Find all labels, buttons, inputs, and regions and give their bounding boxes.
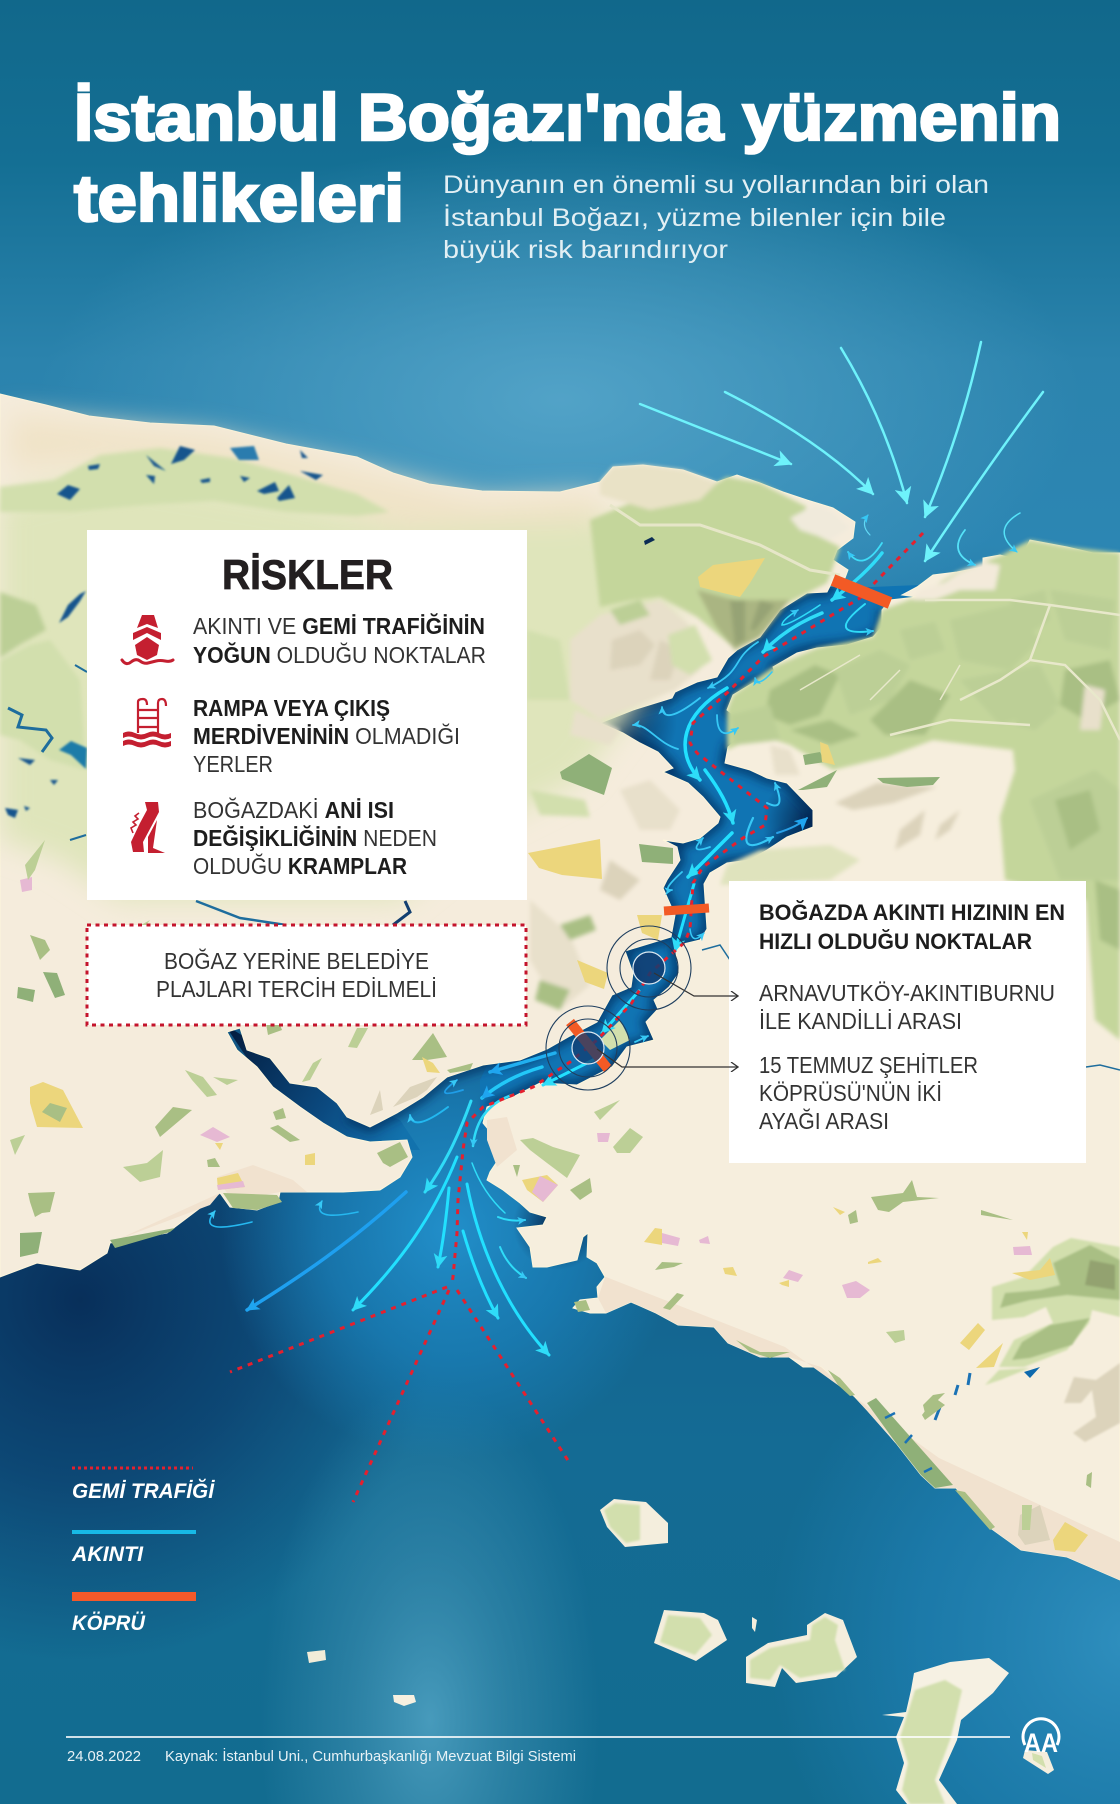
title	[74, 80, 1061, 235]
legend: bridge	[72, 1592, 196, 1635]
icon: AA logo	[1023, 1719, 1059, 1758]
callout: prefer municipal beaches: PLAJLARI TERCİH EDİLMELİ	[156, 976, 437, 1002]
subtitle	[443, 171, 989, 264]
location text: 15 Temmuz bridge: 15 TEMMUZ ŞEHİTLER	[759, 1052, 978, 1078]
field patches south-west	[30, 1082, 83, 1128]
location text: 15 Temmuz bridge: AYAĞI ARASI	[759, 1108, 889, 1134]
lower Asian terrain	[720, 845, 860, 885]
panel: risks: RİSKLER	[222, 551, 393, 598]
risk text: currents and ship traffic: AKINTI VE GEMİ TRAFİĞİNİN	[193, 612, 485, 639]
risk text: cramps	[193, 797, 437, 879]
panel heading: BOĞAZDA AKINTI HIZININ EN	[759, 900, 1065, 925]
fast current hotspot: Arnavutköy-Kandilli	[607, 926, 691, 1010]
title: tehlikeleri	[74, 161, 404, 235]
land: Asian side	[483, 540, 1120, 1580]
southern Asian hill	[985, 1238, 1120, 1442]
location text: 15 Temmuz bridge	[759, 1052, 978, 1134]
icon: AA logo: AA	[1024, 1728, 1058, 1758]
risk text: cramps: BOĞAZDAKİ ANİ ISI	[193, 797, 394, 823]
risk text: missing ramps or ladders: RAMPA VEYA ÇIKIŞ	[193, 695, 390, 721]
risk text: currents and ship traffic: YOĞUN OLDUĞU NOKTALAR	[193, 641, 486, 668]
location text: 15 Temmuz bridge: KÖPRÜSÜ'NÜN İKİ	[759, 1080, 942, 1106]
callout: prefer municipal beaches	[87, 925, 526, 1025]
location text: Arnavutköy	[759, 980, 1055, 1034]
risk text: cramps: DEĞİŞİKLİĞİNİN NEDEN	[193, 824, 437, 851]
forest roads	[890, 600, 1120, 740]
Asian forest	[720, 540, 1120, 1040]
title: İstanbul Boğazı'nda yüzmenin	[74, 80, 1061, 154]
risk text: missing ramps or ladders: YERLER	[193, 751, 273, 777]
islands	[307, 1499, 1054, 1804]
footer: Kaynak: İstanbul Uni., Cumhurbaşkanlığı Mevzuat Bilgi Sistemi	[165, 1747, 576, 1765]
subtitle: Dünyanın en önemli su yollarından biri olan	[443, 171, 989, 199]
footer	[66, 1736, 1010, 1765]
land: European side	[0, 394, 855, 1277]
callout: prefer municipal beaches: BOĞAZ YERİNE BELEDİYE	[164, 948, 429, 974]
strait water	[230, 585, 918, 1266]
footer: 24.08.2022	[67, 1748, 141, 1765]
soft woodland colours	[0, 415, 680, 900]
location text: Arnavutköy: ARNAVUTKÖY-AKINTIBURNU	[759, 980, 1055, 1006]
bridges	[570, 580, 890, 1069]
forest shading	[765, 665, 840, 725]
field patches west	[560, 754, 612, 795]
ship traffic route	[230, 533, 923, 1502]
fast current hotspot: 15 Temmuz bridge	[546, 1006, 630, 1090]
location text: Arnavutköy: İLE KANDİLLİ ARASI	[759, 1008, 962, 1034]
icon: pool ladder	[123, 699, 171, 748]
southern Asian fields	[520, 1138, 580, 1178]
risk text: cramps: OLDUĞU KRAMPLAR	[193, 853, 407, 879]
shore tan band	[598, 1277, 1120, 1580]
legend: bridge: KÖPRÜ	[72, 1612, 146, 1635]
icon: ship	[122, 615, 173, 664]
legend: current: AKINTI	[71, 1543, 144, 1566]
forest and hills west	[0, 448, 850, 1010]
icon: leg cramp	[131, 802, 165, 853]
subtitle: büyük risk barındırıyor	[443, 236, 728, 264]
subtitle: İstanbul Boğazı, yüzme bilenler için bile	[443, 203, 946, 232]
panel heading: HIZLI OLDUĞU NOKTALAR	[759, 929, 1032, 954]
legend	[71, 1468, 215, 1635]
current arrows: Marmara outflow	[210, 1080, 549, 1355]
panel: fastest current points	[729, 881, 1086, 1163]
risk text: currents and ship traffic	[193, 612, 486, 668]
legend: current	[71, 1530, 196, 1566]
panel heading	[759, 900, 1065, 954]
leader arrows to hotspots	[597, 973, 738, 1067]
legend: ship traffic: GEMİ TRAFİĞİ	[72, 1479, 215, 1503]
risk text: missing ramps or ladders: MERDİVENİNİN OLMADIĞI	[193, 723, 460, 749]
lakes and rivers	[5, 446, 1120, 1070]
current arrows: along the strait	[482, 553, 882, 1098]
panel: risks	[87, 530, 527, 900]
current arrows: north approaches	[640, 342, 1043, 565]
risk text: missing ramps or ladders	[193, 695, 460, 777]
